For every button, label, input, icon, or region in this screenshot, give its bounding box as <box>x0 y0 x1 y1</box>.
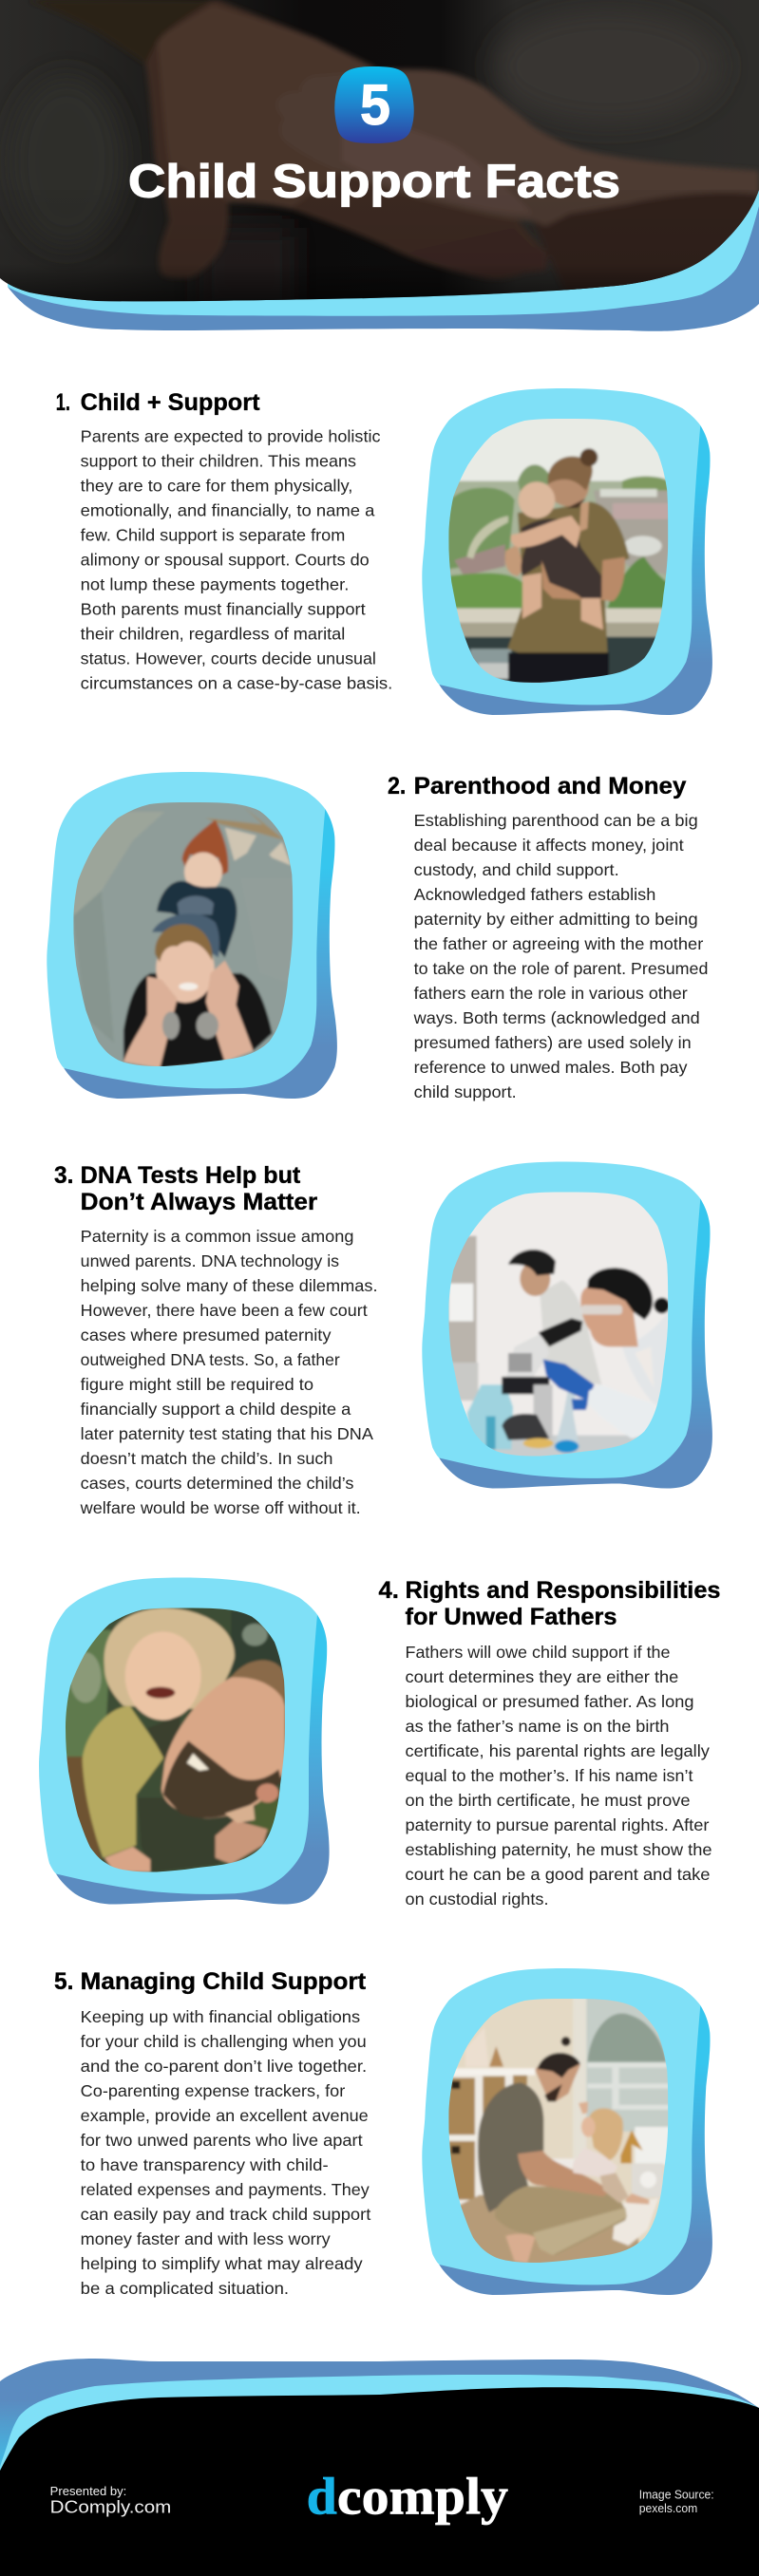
body text: fact 3: outweighed DNA tests. So, a father <box>81 1350 340 1369</box>
photo frame: father holding baby <box>422 388 712 715</box>
body text: fact 2: to take on the role of parent. Presumed <box>414 959 708 978</box>
panel: fact 3 <box>54 1162 712 1517</box>
credit: presented by: Presented by: <box>50 2484 126 2498</box>
body text: fact 5: helping to simplify what may already <box>81 2254 363 2273</box>
body text: fact 4: on the birth certificate, he must prove <box>405 1791 690 1810</box>
body text: fact 2: child support. <box>414 1082 517 1101</box>
panel: fact 5 <box>54 1968 712 2298</box>
body text: fact 4: Fathers will owe child support if the <box>405 1643 671 1662</box>
title: Child Support Facts <box>128 156 620 207</box>
heading: fact 1: Child + Support <box>81 389 260 416</box>
credit: presented by <box>50 2484 171 2517</box>
body text: fact 3: However, there have been a few court <box>81 1301 368 1320</box>
body text: fact 5: Keeping up with financial obligations <box>81 2007 360 2026</box>
body text: fact 2: reference to unwed males. Both pay <box>414 1058 688 1077</box>
heading: fact 5: 5. <box>54 1968 73 1995</box>
body text: fact 1: alimony or spousal support. Courts do <box>81 551 370 570</box>
body text: fact 5: Co-parenting expense trackers, for <box>81 2081 345 2100</box>
photo frame: father and daughter at home <box>422 1968 712 2295</box>
header wave: light blue layer <box>8 180 759 316</box>
panel: fact 1 <box>56 388 712 715</box>
body text: fact 3: helping solve many of these dilemmas. <box>81 1276 377 1295</box>
heading: fact 4 <box>378 1577 720 1630</box>
heading: fact 2: Parenthood and Money <box>414 773 686 799</box>
body text: fact 2: Acknowledged fathers establish <box>414 885 655 904</box>
logo: dcomply: dcomply <box>307 2468 508 2526</box>
body text: fact 4 <box>405 1643 712 1908</box>
body text: fact 5: to have transparency with child- <box>81 2155 329 2174</box>
credit: image source: Image Source: <box>639 2488 714 2501</box>
body text: fact 3: financially support a child despite a <box>81 1400 351 1419</box>
body text: fact 4: establishing paternity, he must show the <box>405 1840 712 1859</box>
body text: fact 3: cases where presumed paternity <box>81 1326 332 1344</box>
body text: fact 3: welfare would be worse off without it. <box>80 1498 361 1517</box>
body text: fact 5: and the co-parent don’t live together. <box>81 2057 367 2076</box>
body text: fact 4: as the father’s name is on the birth <box>405 1717 669 1736</box>
heading: fact 4: Rights and Responsibilities <box>405 1577 720 1604</box>
heading: fact 3: DNA Tests Help but <box>81 1162 301 1189</box>
footer <box>0 2359 759 2576</box>
body text: fact 5: can easily pay and track child support <box>81 2205 370 2224</box>
body text: fact 2: the father or agreeing with the mother <box>414 934 703 953</box>
panel: fact 4 <box>39 1577 720 1908</box>
heading: fact 2: 2. <box>388 773 406 799</box>
photo frame: baby on father's shoulders <box>47 772 337 1099</box>
body text: fact 2: Establishing parenthood can be a big <box>414 811 698 830</box>
body text: fact 1: they are to care for them physically, <box>81 477 352 496</box>
heading: fact 4: for Unwed Fathers <box>405 1604 617 1630</box>
photo frame: lab scientists <box>422 1162 712 1489</box>
body text: fact 2: deal because it affects money, joint <box>414 836 684 855</box>
credit: image source <box>639 2488 714 2515</box>
body text: fact 4: certificate, his parental rights are legally <box>405 1741 710 1760</box>
body text: fact 4: court he can be a good parent and take <box>405 1865 711 1884</box>
heading: fact 3: 3. <box>54 1162 73 1189</box>
footer wave: light blue layer <box>0 2375 759 2478</box>
heading: fact 3 <box>54 1162 317 1215</box>
heading: fact 1: 1. <box>56 389 70 416</box>
body text: fact 5: be a complicated situation. <box>81 2279 289 2298</box>
body text: fact 5 <box>81 2007 370 2298</box>
body text: fact 1: support to their children. This means <box>81 452 356 471</box>
body text: fact 2: paternity by either admitting to being <box>414 910 698 929</box>
footer background <box>0 2387 759 2576</box>
body text: fact 2 <box>413 811 708 1101</box>
body text: fact 5: money faster and with less worry <box>81 2229 331 2248</box>
body text: fact 3: unwed parents. DNA technology is <box>81 1251 339 1270</box>
body text: fact 1: Both parents must financially support <box>81 600 366 619</box>
heading: fact 3: Don’t Always Matter <box>81 1189 317 1215</box>
body text: fact 3: Paternity is a common issue among <box>81 1227 353 1246</box>
body text: fact 5: for your child is challenging when you <box>81 2032 367 2051</box>
body text: fact 2: presumed fathers) are used solely in <box>414 1033 692 1052</box>
footer wave: dark blue layer <box>0 2359 759 2478</box>
body text: fact 2: fathers earn the role in various other <box>414 984 688 1003</box>
body text: fact 2: custody, and child support. <box>414 860 619 879</box>
body text: fact 4: court determines they are either the <box>405 1667 678 1686</box>
number badge <box>334 66 414 143</box>
body text: fact 5: for two unwed parents who live apart <box>81 2131 363 2150</box>
body text: fact 1: few. Child support is separate from <box>81 526 345 545</box>
body text: fact 1: status. However, courts decide unusual <box>81 649 376 668</box>
body text: fact 5: related expenses and payments. They <box>81 2180 370 2199</box>
body text: fact 1: their children, regardless of marital <box>81 625 345 644</box>
body text: fact 3 <box>80 1227 377 1517</box>
body text: fact 4: paternity to pursue parental rights. After <box>405 1815 710 1834</box>
body text: fact 1: Parents are expected to provide holistic <box>81 427 381 446</box>
body text: fact 1 <box>81 427 392 693</box>
header photo: parent and child hands <box>0 0 759 313</box>
body text: fact 1: circumstances on a case-by-case basis. <box>81 674 392 693</box>
body text: fact 2: ways. Both terms (acknowledged and <box>413 1008 700 1027</box>
credit: image source: pexels.com <box>639 2502 697 2515</box>
body text: fact 5: example, provide an excellent avenue <box>81 2106 369 2125</box>
header wave: dark blue layer <box>8 180 759 331</box>
body text: fact 3: cases, courts determined the child’s <box>81 1474 354 1493</box>
panel: fact 2 <box>47 772 708 1101</box>
body text: fact 3: doesn’t match the child’s. In such <box>81 1449 332 1468</box>
heading: fact 5: Managing Child Support <box>81 1968 367 1995</box>
body text: fact 4: on custodial rights. <box>405 1890 549 1908</box>
body text: fact 4: equal to the mother’s. If his name isn’t <box>405 1766 693 1785</box>
body text: fact 1: not lump these payments together. <box>81 575 349 594</box>
body text: fact 3: later paternity test stating that his DNA <box>81 1424 373 1443</box>
credit: presented by: DComply.com <box>50 2498 171 2517</box>
photo frame: child on father's shoulders <box>39 1578 330 1905</box>
body text: fact 1: emotionally, and financially, to name a <box>81 501 375 520</box>
body text: fact 3: figure might still be required to <box>81 1375 313 1394</box>
heading: fact 4: 4. <box>378 1577 399 1604</box>
number badge: 5 <box>360 73 390 137</box>
body text: fact 4: biological or presumed father. As long <box>405 1692 693 1711</box>
